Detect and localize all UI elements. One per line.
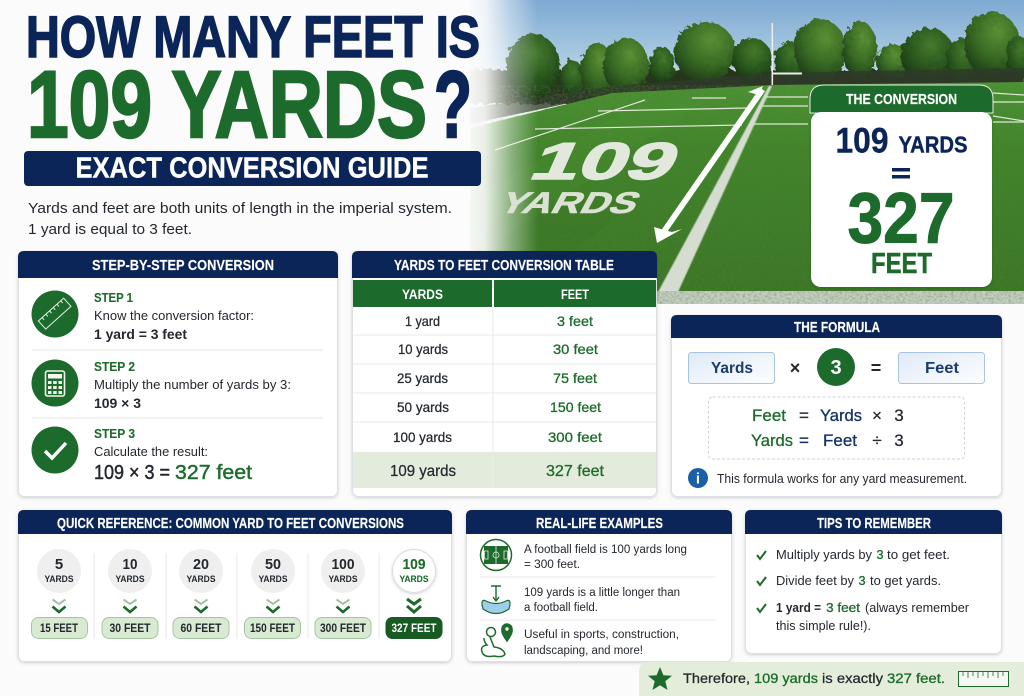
- conversion: 327: 327: [848, 180, 954, 258]
- formula equations: Yards: [820, 406, 862, 425]
- panel: the formula: [671, 315, 1002, 496]
- sideline: [658, 86, 772, 292]
- formula equations: 3: [894, 431, 904, 450]
- example 2 text: 109 yards is a little longer than: [524, 587, 680, 599]
- step 3 text: STEP 3: [94, 427, 135, 441]
- table rows: 30 feet: [553, 341, 598, 357]
- step 3 text: 109 × 3 =: [94, 462, 170, 484]
- table header row: YARDS: [402, 287, 443, 302]
- photo: football field with goal post: [440, 0, 1024, 306]
- equals sign: [892, 168, 910, 178]
- example 2 text: [524, 587, 680, 614]
- table rows: 300 feet: [548, 429, 602, 445]
- table rows: 327 feet: [546, 463, 605, 480]
- step 1 text: STEP 1: [94, 291, 133, 305]
- step 2 text: STEP 2: [94, 360, 135, 374]
- conclusion text: 327 feet.: [887, 671, 945, 686]
- conversion: 109 yards: YARDS: [898, 132, 968, 158]
- formula equations: Feet: [752, 406, 786, 425]
- example 1 text: = 300 feet.: [524, 559, 580, 571]
- table rows: 10 yards: [398, 341, 448, 357]
- step 2 text: Multiply the number of yards by 3:: [94, 377, 291, 392]
- fence: [470, 68, 1024, 124]
- example 2 text: a football field.: [524, 602, 598, 614]
- tip 3: (always remember: [865, 601, 969, 615]
- item: 100 yards: YARDS: [328, 574, 358, 585]
- formula box: feet: [898, 352, 984, 384]
- trees along the far edge of the field: [470, 12, 1024, 104]
- arrow: field length: [654, 86, 765, 243]
- item: 10 yards: [102, 549, 158, 638]
- step 1 text: Know the conversion factor:: [94, 308, 254, 323]
- tip 1: 3: [876, 548, 884, 562]
- formula equations: ×: [872, 406, 882, 425]
- table header row: FEET: [561, 287, 590, 302]
- step 2 text: 109 × 3: [94, 395, 141, 411]
- painted number 109: 109: [522, 132, 690, 190]
- subtitle banner: EXACT CONVERSION GUIDE: [76, 152, 428, 184]
- table rows: 109 yards: [390, 463, 456, 480]
- step 3 text: [94, 427, 252, 484]
- formula box: yards: Yards: [711, 360, 753, 377]
- panel: conversion table: YARDS TO FEET CONVERSION TABLE: [394, 258, 614, 274]
- panel: quick reference: [18, 510, 452, 662]
- factor circle: [817, 348, 855, 386]
- panel: the conversion card: THE CONVERSION: [846, 92, 957, 108]
- panel: step-by-step conversion: STEP-BY-STEP CONVERSION: [92, 258, 274, 274]
- tip 3: [757, 600, 969, 633]
- tip 2: [757, 574, 941, 588]
- painted word YARDS: YARDS: [494, 186, 647, 220]
- table rows: 100 yards: [393, 429, 452, 445]
- panel: tips to remember: TIPS TO REMEMBER: [817, 516, 931, 532]
- icon: check mark: [32, 426, 78, 474]
- conclusion bar: [639, 662, 1024, 696]
- intro text: 1 yard is equal to 3 feet.: [28, 221, 192, 238]
- conclusion text: 109 yards: [754, 671, 818, 686]
- table rows: 1 yard: [405, 313, 440, 329]
- item: 5 yards: 5: [55, 556, 63, 573]
- icon: goal post and pond: [482, 586, 510, 614]
- title line 2: ?: [434, 52, 472, 158]
- item: 50 yards: 50: [265, 556, 281, 573]
- panel: real-life examples: [466, 510, 732, 662]
- tip 2: Divide feet by: [776, 574, 855, 588]
- panel: quick reference: QUICK REFERENCE: COMMON YARD TO FEET CONVERSIONS: [57, 516, 404, 532]
- item: 20 yards: [173, 549, 229, 638]
- item: 109 yards highlighted: YARDS: [400, 574, 428, 585]
- icon: info: [688, 468, 708, 488]
- factor circle: 3: [830, 357, 842, 379]
- grass: [470, 82, 1024, 305]
- conclusion text: [683, 671, 945, 686]
- item: 20 yards: 60 FEET: [180, 623, 222, 635]
- item: 5 yards: [32, 549, 88, 638]
- example 1 text: [524, 544, 687, 571]
- item: 100 yards: 100: [332, 556, 354, 573]
- formula equations: Yards: [751, 431, 793, 450]
- item: 109 yards highlighted: [386, 550, 442, 639]
- item: 100 yards: 300 FEET: [320, 623, 366, 635]
- item: 50 yards: YARDS: [258, 574, 288, 585]
- formula equations: [708, 397, 964, 459]
- icon: calculator: [32, 360, 78, 406]
- panel: real-life examples: REAL-LIFE EXAMPLES: [536, 516, 663, 532]
- equals sign: =: [871, 358, 881, 378]
- formula box: feet: Feet: [925, 360, 960, 377]
- formula note: This formula works for any yard measurement.: [717, 472, 967, 486]
- fade to page background: [462, 0, 538, 306]
- example 1 text: A football field is 100 yards long: [524, 544, 687, 556]
- icon: route with map pin: [482, 624, 512, 657]
- item: 20 yards: 20: [193, 556, 209, 573]
- conclusion text: Therefore,: [683, 671, 750, 686]
- example 3 text: landscaping, and more!: [524, 645, 643, 657]
- panel: the conversion card: [810, 85, 993, 287]
- formula equations: =: [799, 406, 809, 425]
- table rows: 150 feet: [550, 399, 601, 415]
- item: 10 yards: 30 FEET: [110, 623, 150, 635]
- yard lines: [495, 93, 1024, 150]
- tip 2: 3: [858, 574, 866, 588]
- tip 3: this simple rule!).: [776, 619, 871, 633]
- formula equations: Feet: [823, 431, 857, 450]
- panel: tips to remember: [745, 510, 1002, 654]
- conversion: feet: FEET: [871, 248, 932, 280]
- conversion: 109 yards: [836, 120, 968, 160]
- item: 20 yards: YARDS: [186, 574, 216, 585]
- icon: football field: [480, 540, 512, 570]
- table rows: 75 feet: [553, 370, 597, 386]
- item: 100 yards: [315, 549, 371, 638]
- table rows: [390, 313, 605, 480]
- table rows: 50 yards: [397, 399, 449, 415]
- step 1 text: 1 yard = 3 feet: [94, 326, 187, 342]
- item: 10 yards: 10: [122, 556, 138, 573]
- item: 50 yards: [244, 549, 300, 638]
- item: 10 yards: YARDS: [116, 574, 144, 585]
- back line: [656, 291, 1024, 304]
- formula equations: =: [799, 431, 809, 450]
- tip 1: to get feet.: [887, 548, 950, 562]
- item: 5 yards: YARDS: [44, 574, 74, 585]
- step 2 text: [94, 360, 291, 411]
- table header row: [353, 280, 656, 307]
- formula equations: 3: [894, 406, 904, 425]
- icon: ruler: [32, 290, 78, 338]
- icon: ruler: [958, 672, 1008, 686]
- intro text: Yards and feet are both units of length in the imperial system.: [28, 200, 452, 217]
- panel: the formula: THE FORMULA: [794, 320, 880, 336]
- item: 5 yards: 15 FEET: [40, 623, 78, 635]
- table rows: 25 yards: [397, 370, 448, 386]
- multiply sign: ×: [790, 358, 800, 378]
- tip 3: 1 yard =: [776, 600, 821, 615]
- title line 1: HOW MANY FEET IS: [26, 5, 480, 70]
- icon: star: [648, 667, 672, 690]
- tip 3: 3 feet: [826, 601, 861, 615]
- conversion: 109 yards: 109: [836, 120, 888, 160]
- intro text: [28, 200, 452, 238]
- mown stripes: [470, 104, 700, 200]
- formula equations: ÷: [872, 431, 882, 450]
- tip 1: [757, 548, 950, 562]
- formula box: yards: [688, 352, 774, 384]
- tip 1: Multiply yards by: [776, 548, 873, 562]
- panel: step-by-step conversion: [18, 251, 338, 496]
- icon: info: i: [696, 470, 700, 488]
- item: 50 yards: 150 FEET: [250, 623, 295, 635]
- step 3 text: 327 feet: [175, 462, 252, 484]
- conclusion text: is exactly: [822, 671, 883, 686]
- example 3 text: Useful in sports, construction,: [524, 629, 679, 641]
- goal post: [772, 23, 802, 85]
- example 3 text: [524, 629, 679, 657]
- step 3 text: Calculate the result:: [94, 444, 208, 459]
- item: 109 yards highlighted: 109: [402, 556, 426, 573]
- item: 109 yards highlighted: 327 FEET: [392, 623, 436, 635]
- highlighted row background: [353, 452, 656, 488]
- table rows: 3 feet: [557, 313, 593, 329]
- step 1 text: [94, 291, 254, 342]
- tip 2: to get yards.: [870, 574, 941, 588]
- title line 2: 109 YARDS: [27, 52, 427, 158]
- panel: conversion table: [352, 251, 657, 496]
